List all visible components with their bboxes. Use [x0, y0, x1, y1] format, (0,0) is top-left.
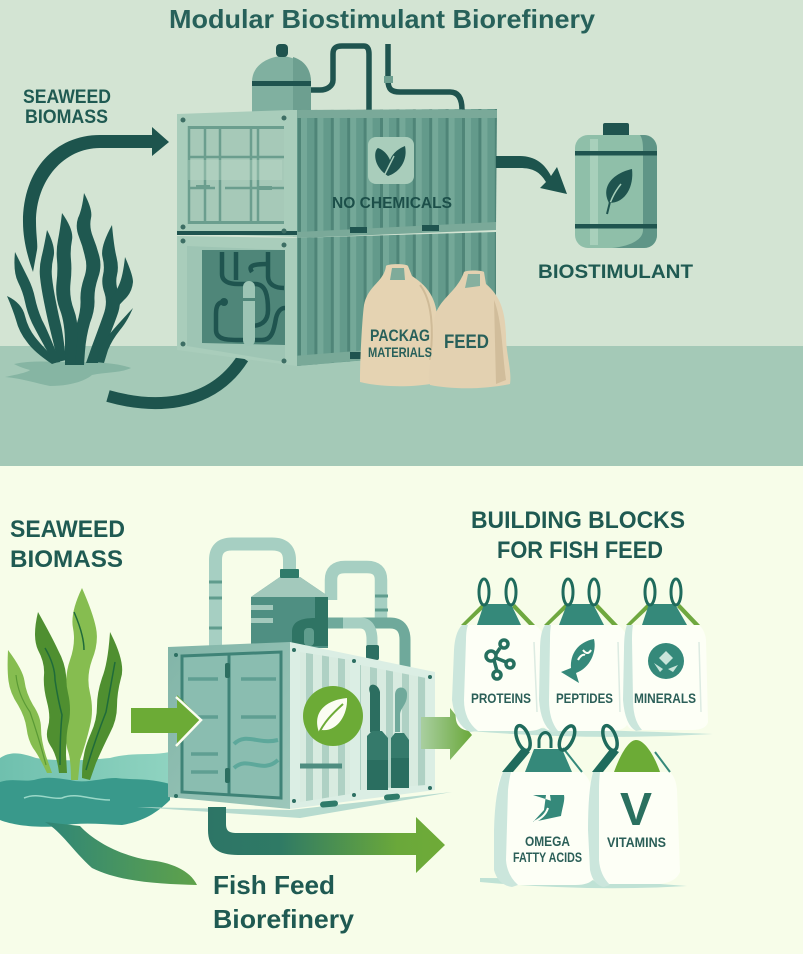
title: Modular Biostimulant Biorefinery: [169, 4, 596, 34]
arrow: container to biostimulant: [496, 156, 567, 194]
sack: feed: FEED: [444, 332, 489, 353]
label: no chemicals: NO CHEMICALS: [332, 195, 452, 212]
bag: proteins: PROTEINS: [471, 690, 531, 706]
upper front frame: [177, 110, 297, 237]
pipes: bottom container: [209, 544, 405, 668]
label: fish feed biorefinery: Fish Feed: [213, 870, 335, 900]
arrow: seaweed into container: [131, 695, 202, 747]
arrow: lower left curved: [108, 358, 243, 403]
label: fish feed biorefinery: Biorefinery: [213, 904, 355, 934]
test tube: [243, 281, 255, 346]
tank on top of container: [252, 44, 311, 112]
tank: bottom container: [251, 569, 328, 648]
heading: building blocks for fish feed: FOR FISH FEED: [497, 537, 663, 564]
icon: no chemicals leaf badge: [368, 137, 414, 184]
corner bolts: [180, 116, 286, 364]
label: seaweed biomass bottom: [10, 516, 125, 573]
sack: package materials: PACKAG: [370, 326, 430, 345]
container: biostimulant biorefinery: [177, 109, 497, 366]
arrow: seaweed to container: [23, 127, 169, 272]
label: seaweed biomass top: [23, 87, 111, 128]
bag: peptides: PEPTIDES: [556, 690, 613, 706]
upper side panel: [293, 109, 497, 237]
bag: minerals: MINERALS: [634, 690, 696, 706]
bag: vitamins: VITAMINS: [607, 834, 666, 850]
panel: bottom background: [0, 466, 803, 954]
bag: vitamins: [588, 724, 680, 887]
bag: omega fatty acids: OMEGA: [525, 833, 570, 849]
water: back wave: [0, 752, 170, 800]
heading: building blocks for fish feed: [471, 507, 685, 564]
interior pipes: [216, 252, 285, 340]
pipes above container: [311, 44, 462, 110]
lower front frame: [177, 236, 297, 366]
water: front wave and tail: [0, 778, 197, 885]
bag: peptides: [539, 579, 628, 732]
label: biostimulant: BIOSTIMULANT: [538, 262, 693, 283]
label: fish feed biorefinery: [213, 870, 355, 934]
sack: package materials: MATERIALS: [368, 344, 432, 360]
label: seaweed biomass bottom: BIOMASS: [10, 546, 123, 573]
bag: proteins: [452, 579, 713, 737]
bag: minerals: [623, 579, 708, 731]
icon: leaf badge: [303, 686, 363, 746]
label: seaweed biomass top: SEAWEED: [23, 87, 111, 108]
heading: building blocks for fish feed: BUILDING BLOCKS: [471, 507, 685, 534]
icon: biostimulant jug: [575, 123, 657, 248]
container: fish feed biorefinery: [137, 642, 452, 818]
inner bottles: [369, 685, 380, 732]
bag: omega fatty acids: FATTY ACIDS: [513, 849, 582, 865]
icon: dark seaweed: [5, 193, 133, 386]
panel: top background: [0, 0, 803, 466]
arrow: lower output: [208, 807, 445, 873]
bag: vitamins: V: [620, 783, 652, 835]
icon: green seaweed: [8, 588, 122, 780]
label: seaweed biomass top: BIOMASS: [25, 107, 108, 128]
sack: package materials: [360, 264, 438, 386]
sack: feed: [429, 270, 510, 388]
arrow: container to building blocks: [421, 708, 472, 760]
lower side panel: [293, 232, 496, 366]
label: seaweed biomass bottom: SEAWEED: [10, 516, 125, 543]
bag: omega fatty acids: [480, 724, 687, 888]
